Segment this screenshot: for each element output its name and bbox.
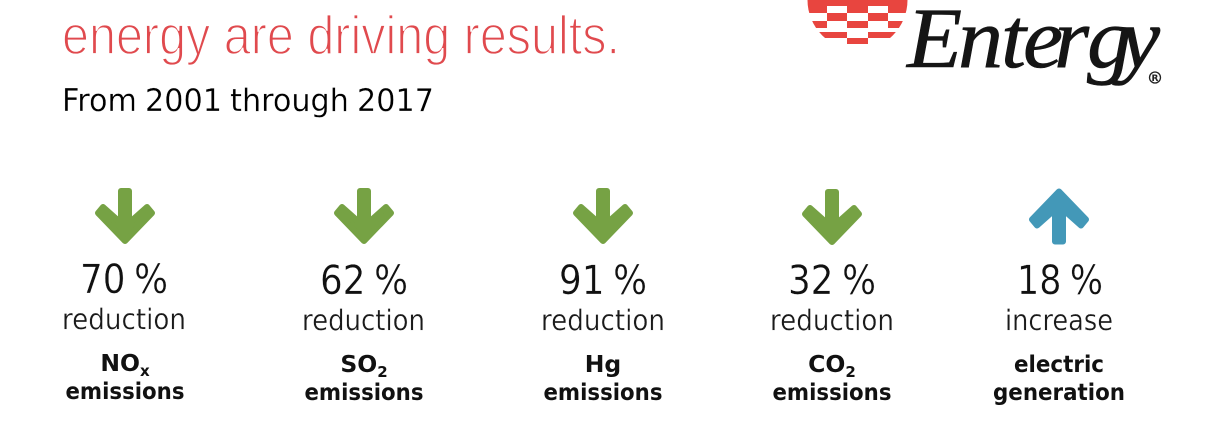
stat: CO2 [770, 192, 894, 406]
change label: reduction [62, 303, 186, 336]
metric name: 2 [845, 363, 856, 381]
stat: NOx [62, 191, 186, 405]
stat: SO2 [302, 191, 425, 406]
title: energy are driving results. [62, 4, 620, 66]
stat: Hg [541, 191, 665, 406]
metric name: CO [808, 350, 845, 378]
stat: electric generation [993, 192, 1125, 406]
change label: increase [1005, 304, 1113, 337]
value: 18 % [1017, 258, 1103, 304]
icon: green down arrow [805, 192, 859, 242]
logo mark: red brick semicircle [808, 0, 908, 44]
metric name: x [140, 362, 150, 380]
metric name line 2: emissions [66, 377, 184, 405]
value: 62 % [320, 258, 408, 304]
value: 32 % [788, 258, 876, 304]
metric name: Hg [585, 350, 621, 378]
logo: Entergy [800, 0, 1161, 87]
metric name: SO [340, 350, 377, 378]
metric name line 2: emissions [304, 378, 424, 406]
subtitle: From 2001 through 2017 [62, 83, 434, 119]
change label: reduction [302, 304, 425, 337]
icon: blue up arrow [1032, 192, 1086, 242]
metric name: NO [100, 349, 140, 377]
icon: green down arrow [98, 191, 152, 241]
metric name line 2: emissions [544, 378, 662, 406]
icon: green down arrow [576, 191, 630, 241]
registered mark [1150, 72, 1160, 84]
icon: green down arrow [337, 191, 391, 241]
change label: reduction [770, 304, 894, 337]
metric name: 2 [377, 363, 388, 381]
metric name line 2: emissions [772, 378, 892, 406]
metric name: electric [1014, 350, 1104, 378]
change label: reduction [541, 304, 665, 337]
value: 70 % [80, 257, 168, 303]
value: 91 % [559, 258, 647, 304]
metric name line 2: generation [993, 378, 1125, 406]
registered mark: R [1152, 74, 1159, 84]
